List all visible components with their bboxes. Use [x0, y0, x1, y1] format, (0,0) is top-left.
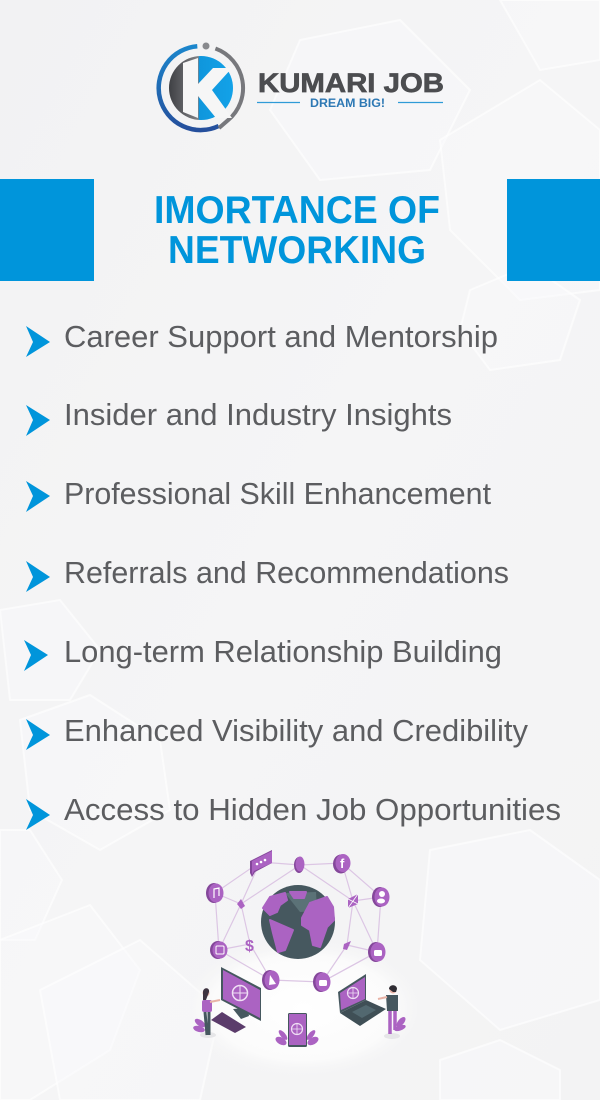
logo wordmark: KUMARI JOB	[258, 68, 444, 98]
left title band	[0, 179, 94, 281]
like node left	[313, 972, 330, 992]
phone	[274, 1013, 320, 1047]
logo	[159, 42, 444, 130]
logo mark	[159, 42, 243, 130]
play node	[262, 970, 280, 990]
woman	[200, 988, 220, 1038]
networking illustration	[181, 850, 425, 1078]
globe	[261, 885, 335, 959]
mail node	[348, 894, 358, 908]
facebook node	[333, 854, 350, 874]
heart node	[237, 899, 245, 909]
laptop	[338, 974, 386, 1026]
person node	[372, 887, 390, 907]
social nodes	[206, 850, 390, 992]
item 5: Long-term Relationship Building	[64, 634, 502, 669]
title: IMORTANCE OF	[154, 189, 440, 232]
item 2: Insider and Industry Insights	[64, 397, 452, 432]
man	[378, 985, 407, 1039]
logo tagline: DREAM BIG!	[310, 96, 385, 110]
title: NETWORKING	[168, 229, 426, 272]
network lines	[215, 862, 381, 982]
list of networking benefits	[24, 319, 561, 830]
facebook node: f	[340, 856, 345, 871]
desktop monitor	[221, 967, 261, 1021]
pin node	[294, 856, 304, 873]
title	[154, 189, 440, 272]
dollar node: $	[245, 938, 254, 955]
illustration backdrop	[181, 938, 425, 1078]
item 1: Career Support and Mentorship	[64, 319, 498, 354]
item 7: Access to Hidden Job Opportunities	[64, 792, 561, 827]
item 3: Professional Skill Enhancement	[64, 476, 491, 511]
left plant	[192, 1017, 207, 1033]
keyboard	[211, 1012, 246, 1033]
news node	[210, 941, 228, 959]
twitter node	[343, 941, 351, 950]
like node right	[368, 942, 386, 962]
music node	[206, 883, 224, 903]
right title band	[507, 179, 600, 281]
item 4: Referrals and Recommendations	[64, 555, 509, 590]
item 6: Enhanced Visibility and Credibility	[64, 713, 528, 748]
chat node	[250, 850, 272, 877]
